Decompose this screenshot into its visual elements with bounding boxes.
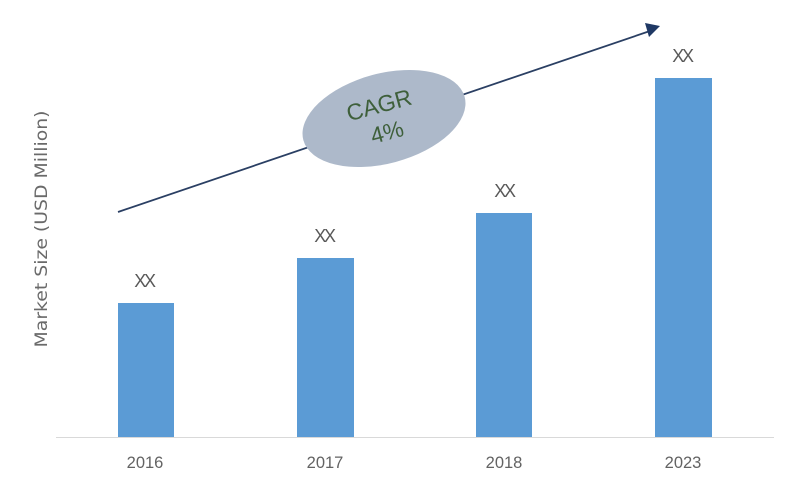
year 2016: 2016 (127, 454, 163, 472)
bar 2018 (476, 213, 532, 437)
value 2017: XX (314, 226, 336, 246)
value 2016: XX (134, 271, 156, 291)
year 2017: 2017 (307, 454, 343, 472)
value 2018: XX (494, 181, 516, 201)
callout text: 4% (368, 115, 406, 149)
bar 2023 (655, 78, 712, 437)
value 2023: XX (672, 46, 694, 66)
arrow: growth trend (118, 23, 660, 212)
y axis title: Market Size (USD Million) (32, 111, 51, 347)
value labels (134, 46, 694, 291)
bars (118, 78, 712, 437)
bar 2017 (297, 258, 354, 437)
category labels (127, 454, 701, 472)
callout text: CAGR (344, 84, 414, 126)
callout text (344, 84, 414, 149)
year 2023: 2023 (665, 454, 701, 472)
bar 2016 (118, 303, 174, 437)
year 2018: 2018 (486, 454, 522, 472)
callout: CAGR ellipse (292, 53, 476, 184)
